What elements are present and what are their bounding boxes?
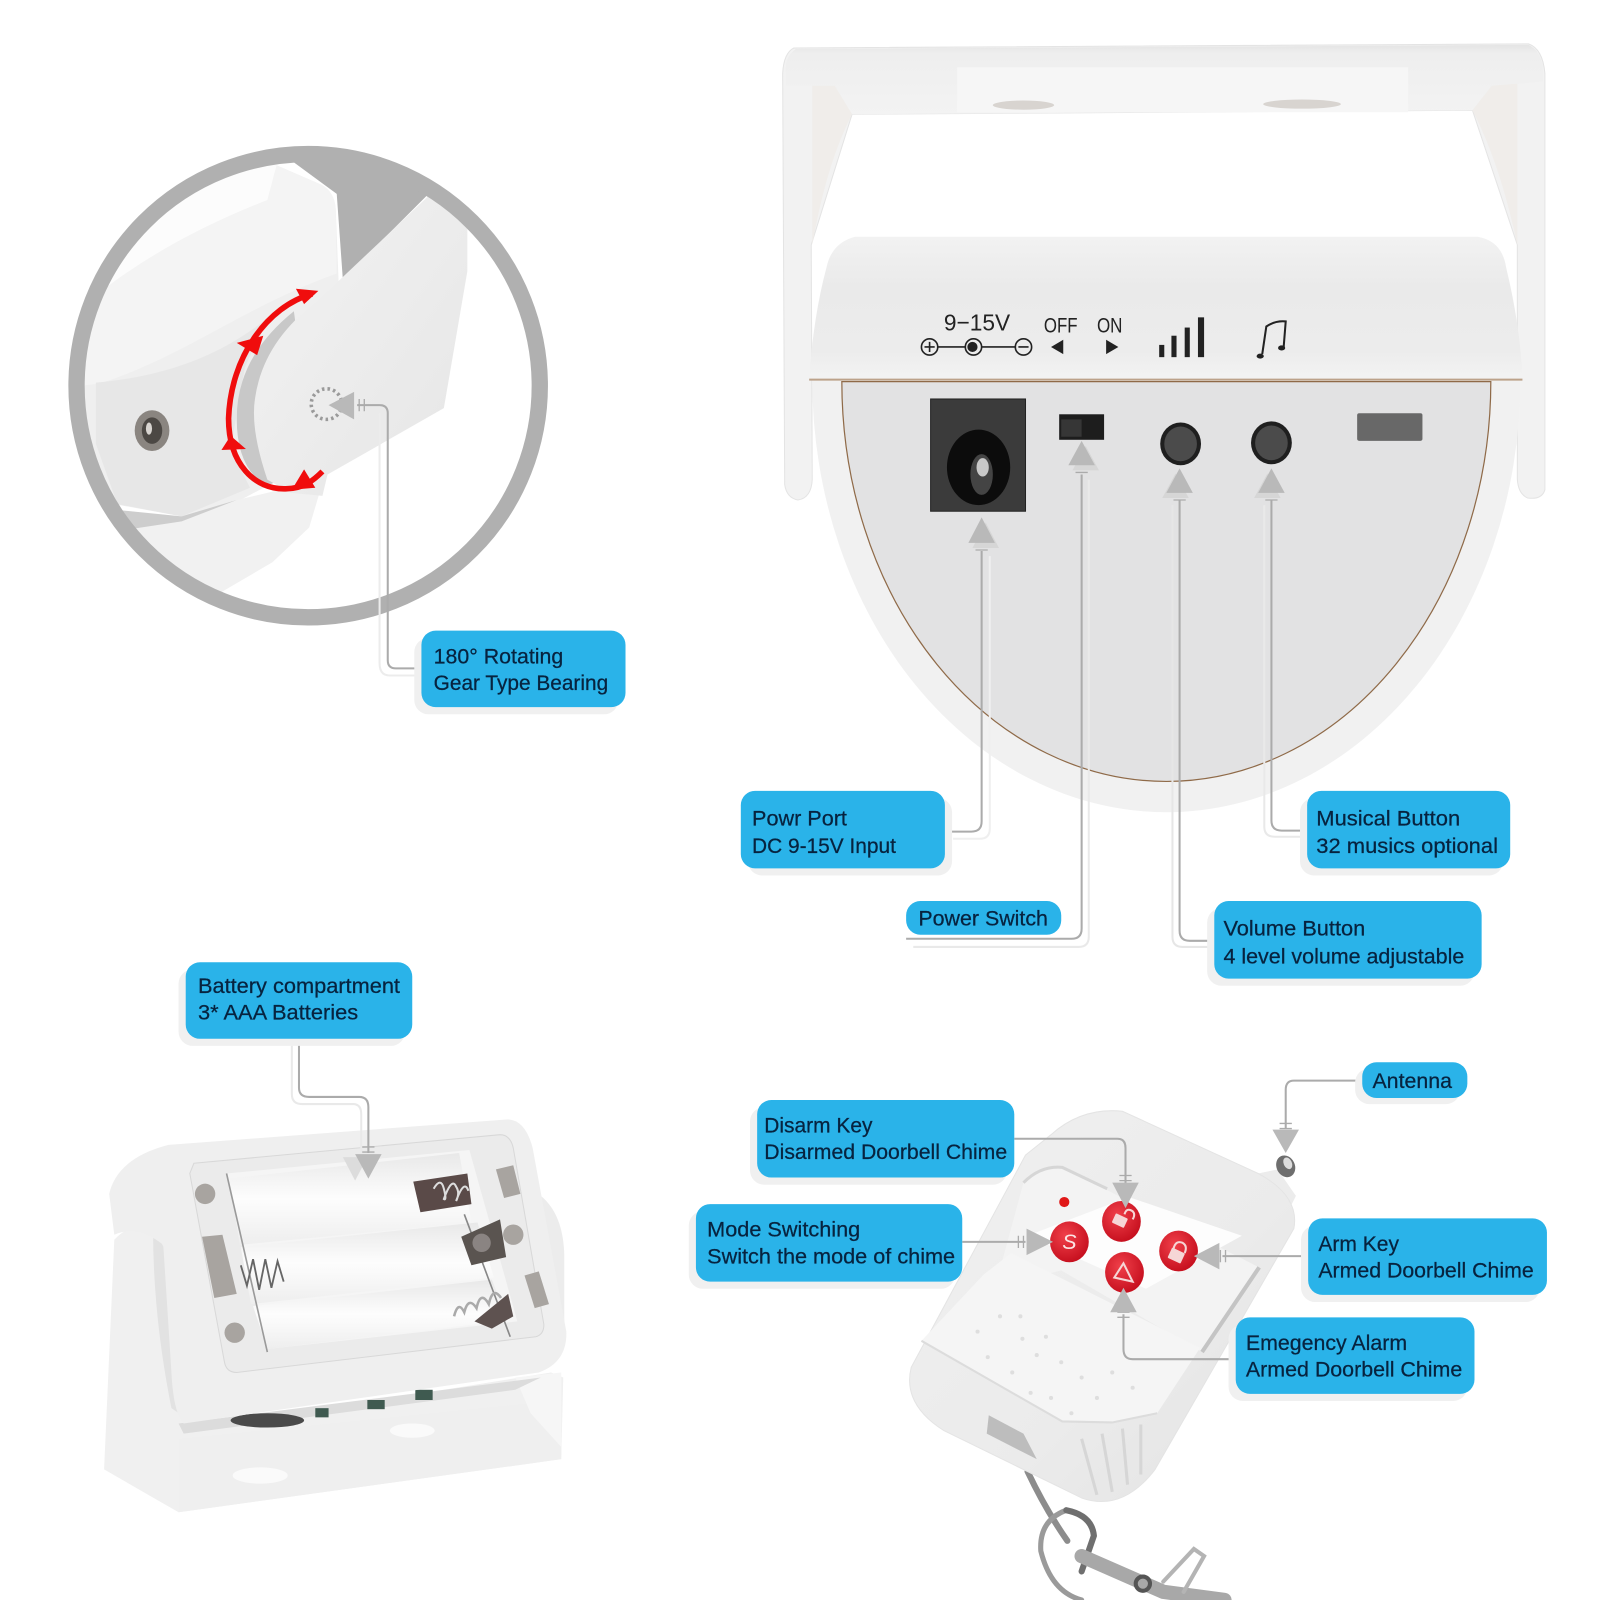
screw holes and slots: [195, 1165, 549, 1343]
printed legend: OFF: [1044, 314, 1078, 338]
callout: power port: DC 9-15V Input: [752, 834, 896, 858]
keyring and clasp: [1010, 1434, 1224, 1600]
callout: 180 rotating bearing: Gear Type Bearing: [434, 671, 608, 695]
callout: 180 rotating bearing: 180° Rotating: [434, 644, 563, 668]
main housing: [109, 1119, 566, 1423]
connector: power port: [946, 517, 999, 839]
callout: arm key: [1301, 1218, 1547, 1302]
gray ring: [77, 154, 540, 617]
red key: mode: S: [1062, 1230, 1077, 1254]
remote body: [910, 1111, 1295, 1502]
callout: emergency alarm: Armed Doorbell Chime: [1246, 1358, 1462, 1382]
red key: arm: [1159, 1231, 1198, 1271]
callout: mode switching: [689, 1204, 962, 1289]
callout: power port: Powr Port: [752, 807, 847, 831]
connector: power switch: [906, 441, 1099, 947]
callout: 180 rotating bearing: [414, 631, 626, 714]
callout: emergency alarm: [1229, 1317, 1474, 1401]
callout: volume button: [1207, 901, 1482, 986]
volume button: [1160, 422, 1201, 465]
callout: arm key: Arm Key: [1318, 1232, 1399, 1256]
stand and base: [104, 1196, 564, 1512]
callout: disarm key: Disarmed Doorbell Chime: [764, 1140, 1007, 1164]
recess frame: [190, 1135, 544, 1372]
connector: antenna: [1272, 1081, 1362, 1153]
connector: emergency alarm: [1110, 1288, 1236, 1359]
lower grip: [921, 1253, 1200, 1422]
ribbed base: [987, 1415, 1141, 1495]
printed legend: [921, 310, 1286, 359]
callout: battery compartment: 3* AAA Batteries: [198, 1000, 358, 1024]
connector: battery compartment: [292, 1039, 382, 1181]
printed legend: ON: [1097, 314, 1122, 338]
red key: mode: [1050, 1221, 1089, 1262]
battery contacts and springs: [241, 1173, 513, 1329]
battery bay: [227, 1150, 517, 1352]
callout: power switch: Power Switch: [918, 907, 1048, 931]
musical button: [1251, 421, 1292, 464]
callout: musical button: [1300, 791, 1510, 876]
red key: disarm: [1102, 1201, 1141, 1242]
screw: [135, 410, 169, 451]
callout: antenna: [1355, 1062, 1467, 1104]
antenna tip: [1258, 1152, 1299, 1204]
panel: rotating bearing detail: [61, 143, 551, 633]
housing lower shell: [812, 380, 1520, 812]
indicator LED: [1059, 1197, 1069, 1207]
panel: battery compartment photo: [104, 1119, 566, 1512]
connector: rotating bearing: [329, 392, 421, 676]
printed legend: 9−15V: [944, 310, 1011, 336]
callout: battery compartment: [179, 962, 412, 1046]
panel: remote control photo: [910, 1111, 1299, 1600]
icon: red rotation arrows: [221, 289, 322, 490]
red key: emergency: [1105, 1252, 1144, 1293]
callout: musical button: 32 musics optional: [1316, 834, 1498, 858]
callout: emergency alarm: Emegency Alarm: [1246, 1331, 1407, 1355]
magnified bearing photo: [84, 162, 468, 592]
inner panel: [842, 382, 1491, 781]
callout: disarm key: [750, 1100, 1014, 1185]
callout: antenna: Antenna: [1372, 1069, 1452, 1093]
callout: disarm key: Disarm Key: [764, 1114, 873, 1138]
callout: battery compartment: Battery compartment: [198, 974, 400, 998]
housing upper section: [809, 237, 1522, 380]
key panel: [995, 1167, 1259, 1352]
connector: musical button: [1254, 468, 1307, 837]
mounting bracket: [783, 44, 1545, 500]
callout: musical button: Musical Button: [1316, 807, 1460, 831]
power switch: [1059, 414, 1104, 440]
callout: mode switching: Mode Switching: [707, 1218, 860, 1242]
callout: mode switching: Switch the mode of chime: [707, 1244, 955, 1268]
sensor window: [1357, 413, 1422, 441]
callout: power port: [741, 791, 952, 876]
underside with ports: [179, 1378, 541, 1434]
icon: dotted pivot marker: [311, 389, 342, 419]
callout: volume button: 4 level volume adjustable: [1223, 944, 1464, 968]
panel: chime unit rear view: [783, 44, 1545, 812]
callout: arm key: Armed Doorbell Chime: [1318, 1259, 1534, 1283]
connector: mode switching: [962, 1229, 1053, 1255]
connector: disarm key: [1014, 1139, 1139, 1208]
DC power jack: [931, 399, 1026, 511]
connector: volume button: [1162, 468, 1214, 947]
callout: power switch: [906, 901, 1061, 935]
connector: arm key: [1194, 1243, 1308, 1269]
callout: volume button: Volume Button: [1223, 917, 1365, 941]
